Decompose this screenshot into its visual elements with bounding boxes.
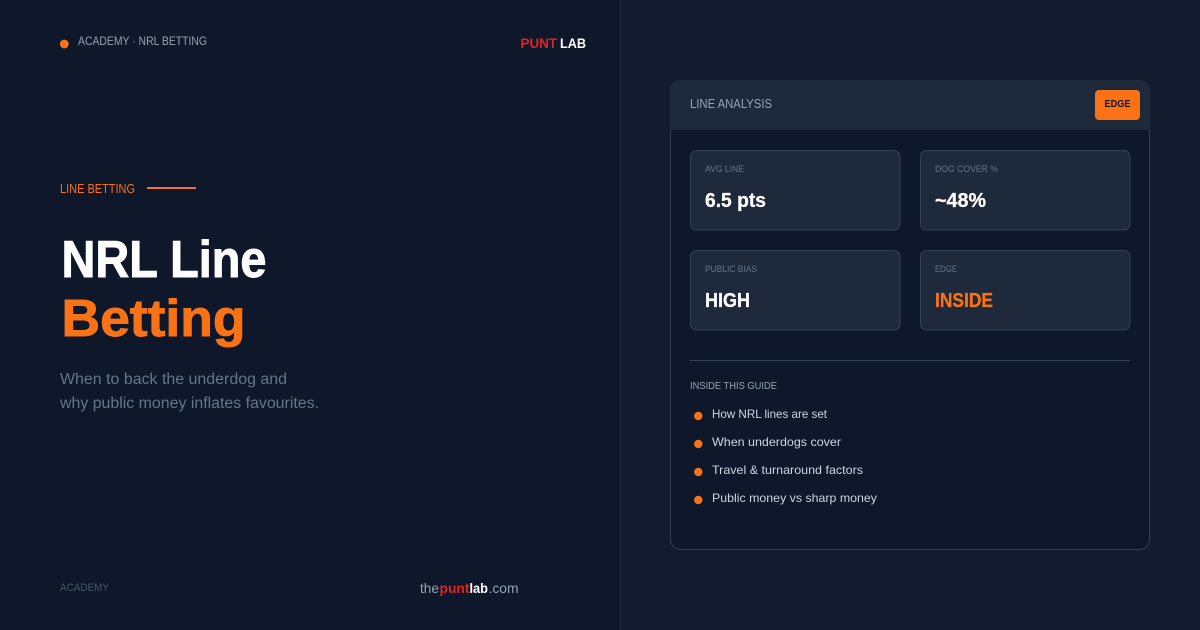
stat: edge: INSIDE [935, 290, 993, 312]
guide list [694, 407, 877, 505]
stat: public bias [690, 250, 900, 330]
card header: LINE ANALYSIS [690, 97, 772, 111]
panel: left background [0, 0, 620, 630]
eyebrow: academy label: ACADEMY · NRL BETTING [78, 36, 207, 48]
category tag: line betting [60, 182, 196, 196]
stat: dog cover [920, 150, 1130, 230]
panel: right background [620, 0, 1200, 630]
title: Betting [62, 289, 246, 347]
footer: site url [420, 580, 518, 596]
card header [670, 80, 1150, 130]
title [62, 230, 266, 347]
stat: public bias: HIGH [705, 290, 750, 312]
list item: lines: How NRL lines are set [712, 407, 828, 421]
footer: site url: the [420, 580, 439, 596]
stat: avg line: 6.5 pts [705, 190, 766, 212]
stat: dog cover: DOG COVER % [935, 164, 998, 175]
footer: site url: .com [488, 580, 518, 596]
stat: edge: EDGE [935, 264, 957, 275]
list item: money: Public money vs sharp money [712, 491, 877, 505]
stat: avg line [690, 150, 900, 230]
guide heading: INSIDE THIS GUIDE [690, 380, 777, 392]
stat: avg line: AVG LINE [705, 164, 744, 175]
list item: underdogs: When underdogs cover [712, 435, 841, 449]
stat: public bias: PUBLIC BIAS [705, 264, 757, 275]
footer: site url: punt [440, 580, 470, 596]
category tag: line betting: LINE BETTING [60, 182, 135, 196]
subtitle: When to back the underdog and [60, 371, 287, 388]
stat: dog cover: ~48% [935, 190, 986, 212]
logo: Punt Lab: LAB [560, 36, 586, 51]
subtitle: why public money inflates favourites. [59, 395, 319, 412]
badge: edge: EDGE [1104, 98, 1130, 110]
stat: edge [920, 250, 1130, 330]
subtitle [59, 371, 319, 412]
badge: edge [1095, 90, 1140, 120]
logo: Punt Lab: PUNT [520, 36, 558, 51]
panel: line analysis card [670, 80, 1150, 550]
footer: section label: ACADEMY [60, 582, 110, 594]
title: NRL Line [62, 230, 266, 288]
list item: travel: Travel & turnaround factors [712, 463, 863, 477]
footer: site url: lab [470, 580, 488, 596]
logo: Punt Lab [520, 36, 586, 51]
